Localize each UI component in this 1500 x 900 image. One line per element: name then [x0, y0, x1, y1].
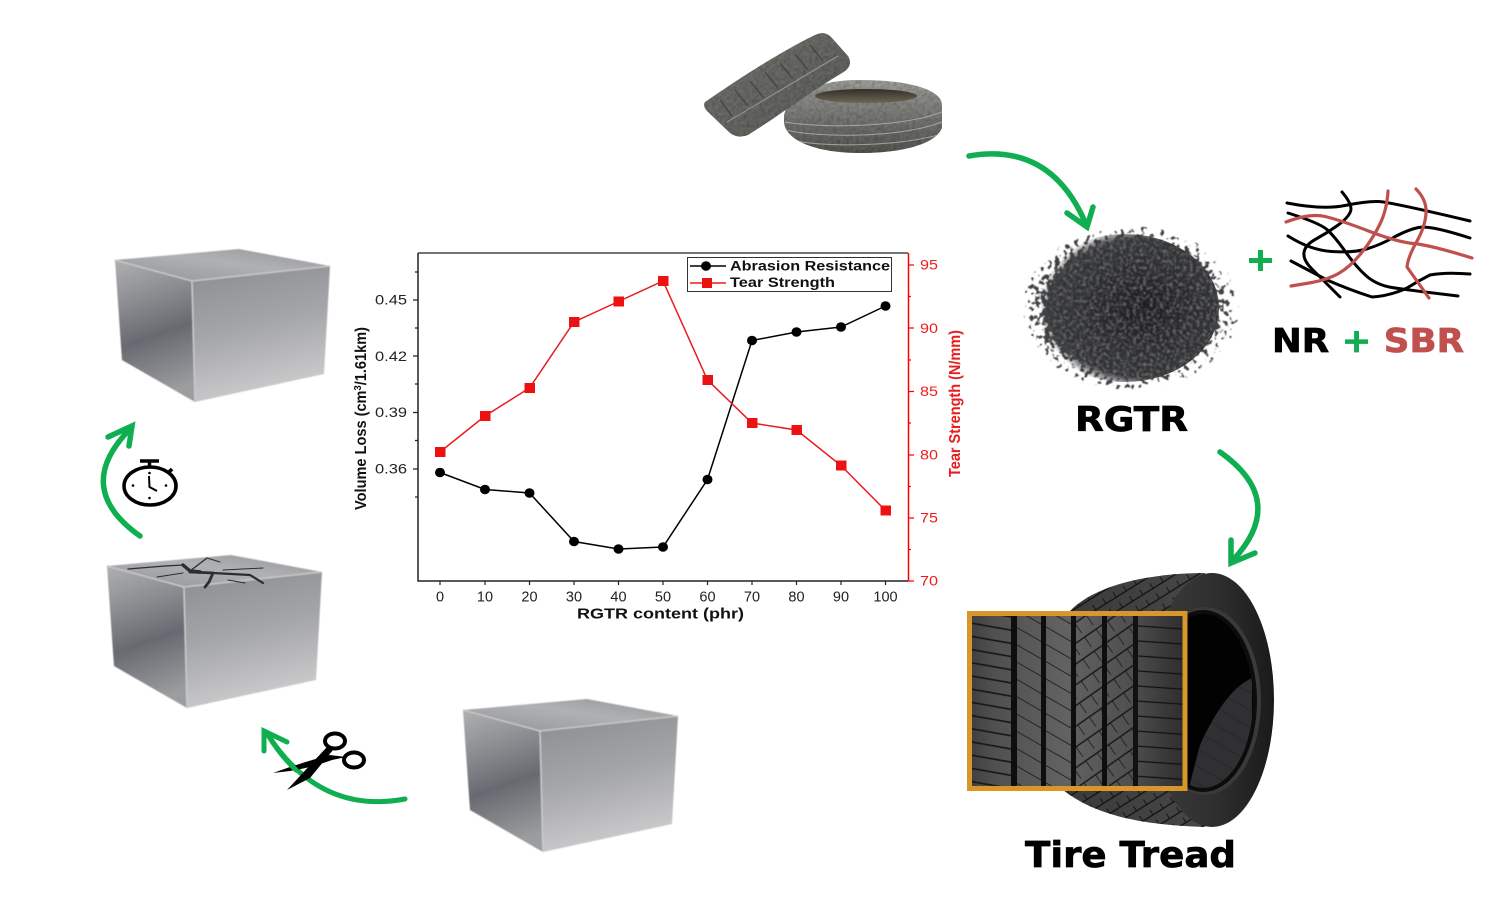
x axis ticks and labels: 100 — [873, 590, 898, 606]
plus sign: green — [1249, 250, 1272, 271]
cube: cracked sample — [107, 555, 322, 708]
x axis ticks and labels: 70 — [744, 590, 760, 606]
chart: abrasion resistance and tear strength vs RGTR content — [353, 253, 964, 622]
SBR chains — [1286, 189, 1472, 298]
x axis ticks and labels: 20 — [521, 590, 538, 606]
old tires photo — [704, 33, 942, 153]
arrow: old tires to RGTR — [969, 154, 1093, 227]
arrow: cracked sample to healed sample — [103, 426, 140, 536]
x axis ticks and labels: 30 — [566, 590, 582, 606]
left axis ticks and labels: 0.36 — [375, 460, 407, 476]
left axis ticks and labels — [375, 272, 418, 497]
x axis ticks and labels — [436, 581, 898, 606]
tread close-up inset — [968, 612, 1186, 789]
x axis ticks and labels: 60 — [699, 590, 716, 606]
legend: Tear Strength — [730, 275, 835, 290]
legend — [688, 258, 892, 292]
left axis ticks and labels: 0.42 — [375, 348, 407, 364]
right axis title: Tear Strength (N/mm) — [947, 330, 964, 477]
right axis ticks and labels: 80 — [920, 446, 938, 462]
right axis ticks and labels: 70 — [920, 572, 938, 588]
right axis ticks and labels — [908, 256, 938, 588]
icon: stopwatch — [124, 461, 176, 505]
label: Tire Tread: Tire Tread — [1025, 835, 1236, 876]
left axis title: 3 — [353, 385, 364, 391]
series: abrasion resistance — [435, 301, 890, 554]
x axis ticks and labels: 0 — [436, 590, 444, 606]
tire inner opening — [1151, 612, 1255, 790]
left axis ticks and labels: 0.39 — [375, 404, 407, 420]
x axis ticks and labels: 80 — [788, 590, 805, 606]
label: NR + SBR: NR + SBR — [1272, 321, 1464, 360]
right axis ticks and labels: 90 — [920, 320, 938, 336]
label: RGTR: RGTR — [1075, 400, 1188, 440]
x axis ticks and labels: 10 — [477, 590, 493, 606]
cube: healed sample — [115, 249, 330, 402]
NR chains — [1287, 192, 1470, 297]
right axis ticks and labels: 75 — [920, 510, 938, 526]
series: tear strength — [435, 276, 891, 516]
lower old tire — [784, 80, 942, 153]
x axis ticks and labels: 40 — [610, 590, 627, 606]
plot frame — [418, 253, 908, 581]
arrowhead: scissors arrow — [264, 731, 296, 770]
RGTR granules pile — [1023, 226, 1239, 390]
cube: bottom uncut sample — [463, 699, 678, 852]
left axis title: /1.61km) — [353, 327, 370, 385]
arrow: sample to cut sample — [268, 735, 405, 802]
arrow: RGTR to tire tread — [1220, 452, 1258, 563]
tire sidewall — [1150, 573, 1274, 827]
left axis ticks and labels: 0.45 — [375, 292, 407, 308]
cracks — [128, 558, 263, 587]
right axis ticks and labels: 95 — [920, 256, 938, 272]
tire body — [1063, 573, 1205, 827]
icon: scissors — [273, 734, 364, 790]
legend: Abrasion Resistance — [730, 258, 891, 274]
tire with tread inset — [968, 573, 1274, 827]
x axis ticks and labels: 90 — [833, 590, 849, 606]
polymer network NR + SBR — [1286, 189, 1472, 298]
x axis title: RGTR content (phr) — [577, 606, 744, 622]
left axis title: Volume Loss (cm — [353, 383, 370, 510]
x axis ticks and labels: 50 — [655, 590, 671, 606]
upper old tire — [704, 33, 850, 137]
right axis ticks and labels: 85 — [920, 383, 938, 399]
